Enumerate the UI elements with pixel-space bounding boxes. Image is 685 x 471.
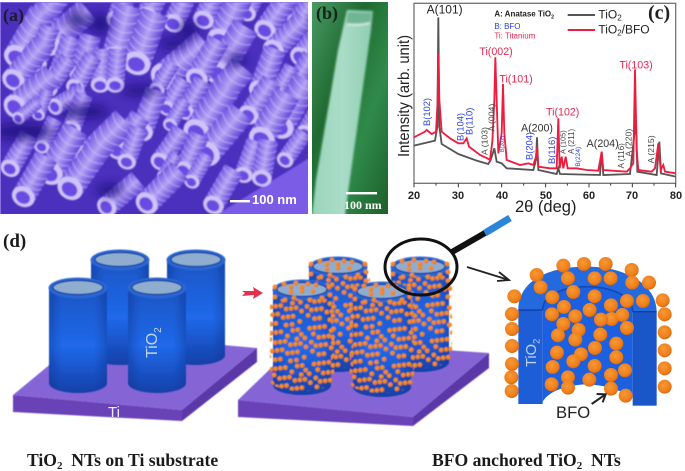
x axis tick labels: 40 — [496, 190, 508, 202]
diagram: TiO2 nanotubes on Ti substrate — [13, 250, 257, 421]
panel b: green SEM image of a single nanotube — [312, 2, 388, 216]
Ti plate — [13, 333, 257, 421]
peak labels: Ti(102) — [546, 107, 579, 119]
peak labels: A (004) — [486, 104, 496, 132]
panel a scale bar — [230, 192, 297, 207]
legend: Ti: Titanium — [494, 31, 536, 40]
panel b label: (b) — [316, 3, 338, 24]
x axis tick labels — [408, 190, 682, 202]
peak labels: A (105) — [559, 130, 568, 154]
red TiO2/BFO curve — [414, 53, 676, 173]
peak labels: A (103) — [479, 127, 489, 155]
legend — [494, 8, 650, 40]
gray TiO2 curve — [414, 17, 676, 177]
caption: left diagram: NTs on Ti substrate — [62, 450, 218, 470]
chart plot area and curves — [414, 3, 676, 187]
caption: right diagram: NTs — [582, 450, 621, 470]
icon: magnifying glass — [385, 218, 510, 295]
peak labels — [422, 3, 656, 168]
peak labels: A(101) — [427, 3, 463, 17]
Ti label: Ti — [108, 404, 120, 421]
y axis title: Intensity (arb. unit) — [396, 35, 413, 157]
legend: /BFO — [622, 23, 650, 37]
peak labels: Ti(101) — [499, 73, 533, 85]
x axis tick labels: 50 — [540, 190, 552, 202]
arrow: red transition arrow — [242, 287, 263, 299]
peak labels: A (116) — [617, 143, 626, 168]
peak labels: Ti(002) — [479, 46, 513, 58]
peak labels: B(116) — [547, 137, 557, 164]
legend: 2 — [551, 14, 554, 20]
TiO2 label: TiO — [524, 344, 540, 367]
Ti plate — [238, 340, 489, 426]
legend: TiO — [598, 23, 617, 37]
diagram: BFO anchored TiO2 nanotubes — [238, 256, 489, 426]
peak labels: B(202) — [500, 136, 506, 152]
peak labels: B(104) — [455, 113, 465, 141]
peak labels: A (211) — [567, 129, 576, 154]
legend: 2 — [617, 29, 622, 38]
caption: left diagram: TiO — [27, 450, 57, 470]
panel b scale bar label: 100 nm — [344, 198, 382, 212]
peak labels: A (215) — [646, 135, 656, 163]
panel a label: (a) — [3, 5, 24, 26]
peak labels: B(102) — [422, 98, 432, 126]
nanotube cylinders — [48, 250, 226, 393]
peak labels: A(200) — [521, 123, 553, 135]
panel d label: (d) — [3, 231, 26, 252]
peak labels: A (220) — [624, 129, 634, 157]
legend: 2 — [617, 14, 622, 23]
BFO pointer arrow — [592, 394, 606, 404]
x axis tick labels: 60 — [583, 190, 595, 202]
legend: B: BFO — [494, 22, 521, 31]
peak labels: B(110) — [465, 108, 475, 135]
legend: A: Anatase TiO — [494, 10, 551, 19]
x axis title: 2θ (deg) — [515, 198, 576, 216]
BFO beads — [504, 257, 672, 403]
x axis tick labels: 80 — [670, 190, 682, 202]
panel c: XRD chart — [396, 2, 682, 216]
peak labels: A(204) — [587, 138, 619, 150]
legend: TiO — [598, 8, 617, 22]
BFO label: BFO — [556, 403, 590, 422]
x axis tick labels: 30 — [452, 190, 464, 202]
x axis tick labels: 20 — [408, 190, 420, 202]
TiO2 label: TiO — [144, 333, 161, 358]
panel c label: (c) — [648, 2, 670, 24]
panel a: purple SEM image of nanotubes — [0, 0, 335, 220]
peak labels: Ti(103) — [619, 59, 653, 71]
arrow: to magnified view — [467, 267, 509, 281]
TiO2 label: 2 — [531, 339, 541, 344]
caption: right diagram: BFO anchored TiO — [432, 450, 577, 470]
panel a scale bar: 100 nm — [252, 192, 297, 207]
diagram: magnified nanotube with BFO beads — [504, 257, 672, 422]
peak labels: B(204) — [524, 132, 534, 160]
peak labels: B(224) — [575, 147, 582, 167]
nanotube cylinders with beads — [270, 256, 452, 397]
x axis tick labels: 70 — [626, 190, 638, 202]
TiO2 label: 2 — [153, 327, 164, 333]
